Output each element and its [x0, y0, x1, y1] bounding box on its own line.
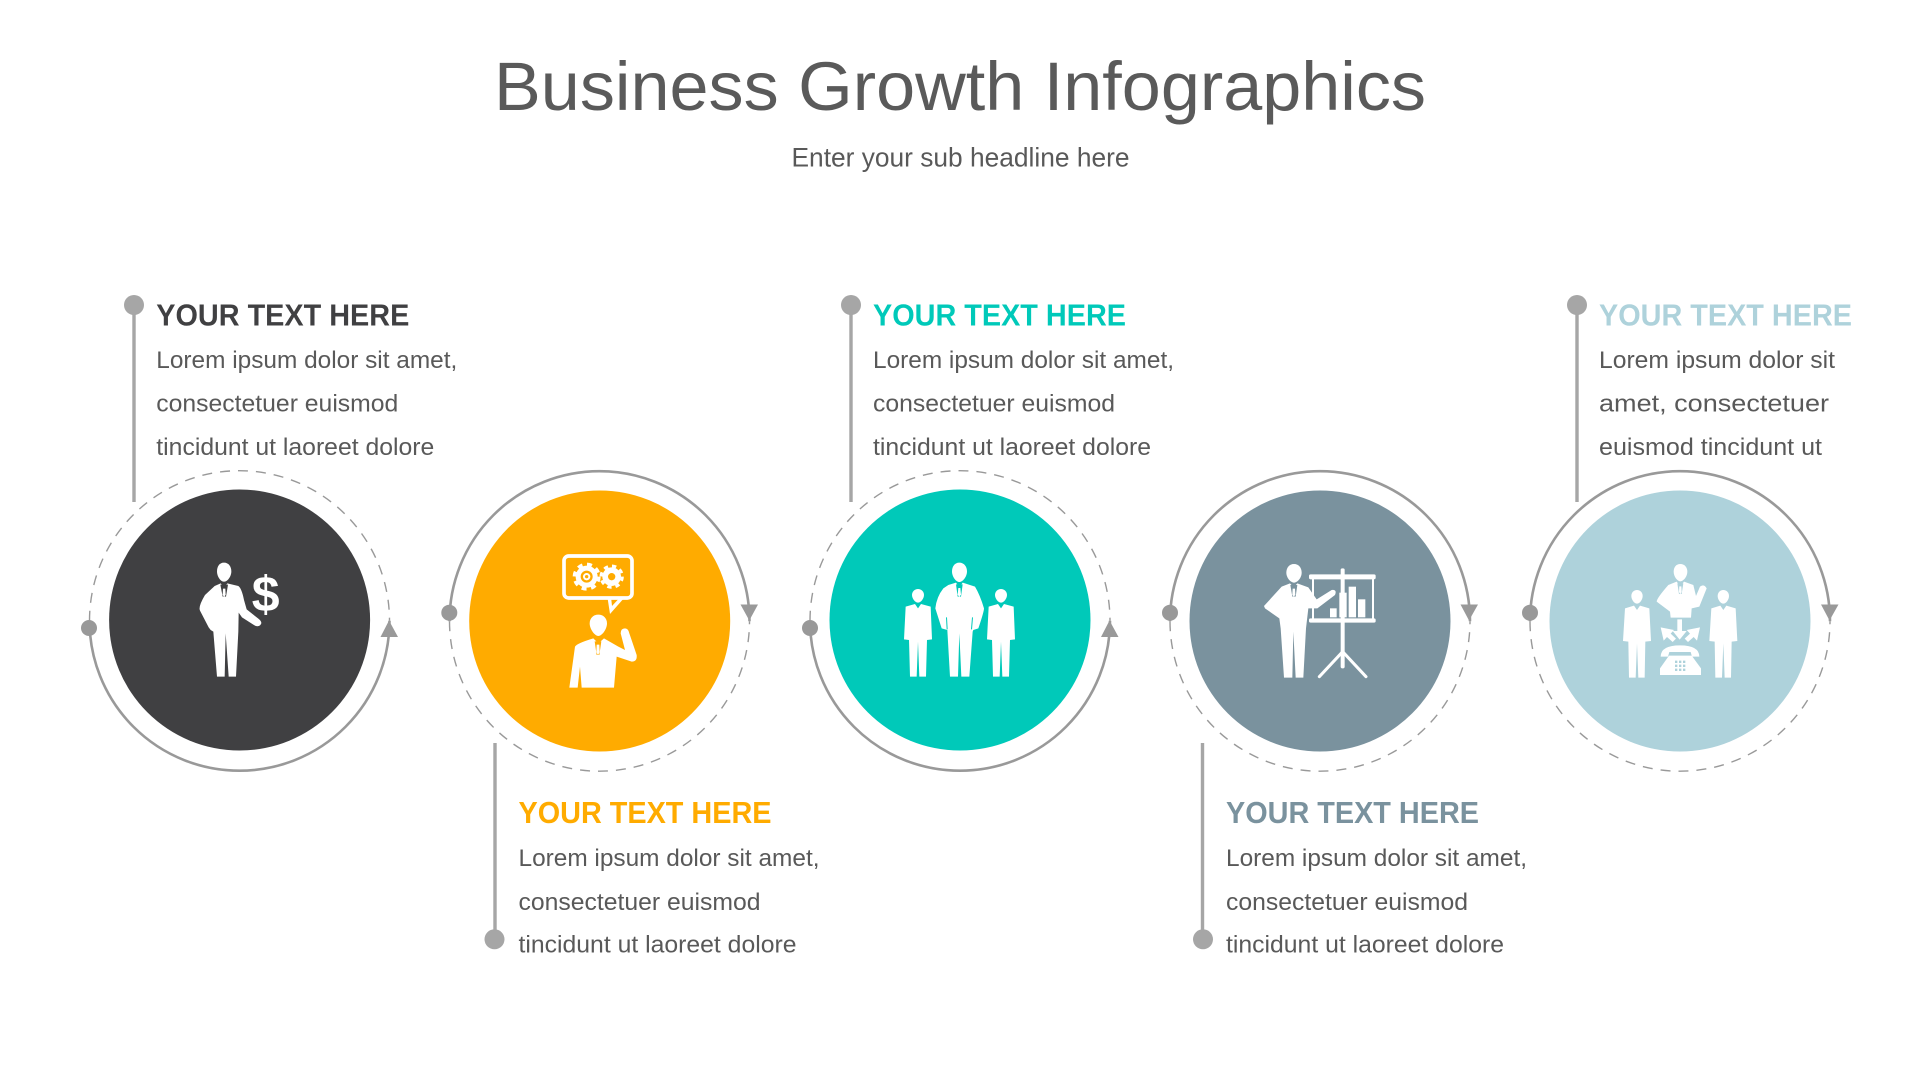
panel: step 3	[802, 295, 1174, 771]
body text 1: consectetuer euismod	[156, 390, 398, 418]
circle 3	[830, 490, 1090, 750]
body text 2: consectetuer euismod	[518, 889, 760, 916]
body text 3: tincidunt ut laoreet dolore	[873, 434, 1151, 461]
body text 1: Lorem ipsum dolor sit amet,	[156, 347, 457, 374]
heading 1: YOUR TEXT HERE	[156, 298, 409, 333]
circle 5	[1550, 490, 1810, 752]
body text 3	[873, 347, 1174, 461]
body text 5: euismod tincidunt ut	[1599, 434, 1822, 461]
connector line 4	[1193, 743, 1213, 949]
icon: businessman with dollar sign: $	[252, 566, 280, 622]
body text 3: Lorem ipsum dolor sit amet,	[873, 347, 1174, 374]
circle 1	[109, 490, 370, 750]
connector line 5	[1567, 295, 1587, 502]
ring 3 with arrow	[802, 471, 1118, 771]
panel: step 2	[441, 471, 820, 959]
body text 4: consectetuer euismod	[1226, 889, 1468, 916]
body text 5: Lorem ipsum dolor sit	[1599, 347, 1835, 374]
heading 2: YOUR TEXT HERE	[518, 795, 772, 830]
connector line 1	[124, 295, 144, 502]
ring 1 with arrow	[81, 471, 398, 771]
body text 2: Lorem ipsum dolor sit amet,	[518, 845, 820, 872]
icon: presenter with chart board	[1264, 564, 1376, 678]
body text 5	[1599, 347, 1835, 461]
ring 4 with arrow	[1162, 471, 1478, 771]
heading 4: YOUR TEXT HERE	[1226, 795, 1479, 830]
body text 1	[156, 347, 457, 461]
body text 4: Lorem ipsum dolor sit amet,	[1226, 845, 1527, 872]
title: Business Growth Infographics	[494, 48, 1426, 125]
body text 2	[518, 845, 820, 959]
body text 4	[1226, 845, 1527, 959]
circle 2	[469, 490, 730, 752]
connector line 3	[841, 295, 861, 502]
icon: businessman with dollar sign	[200, 563, 280, 677]
icon: three businessmen	[904, 563, 1015, 677]
icon: team around telephone	[1623, 564, 1737, 678]
body text 5: amet, consectetuer	[1599, 390, 1829, 418]
body text 2: tincidunt ut laoreet dolore	[518, 932, 796, 959]
connector line 2	[484, 743, 504, 949]
circle 4	[1190, 490, 1450, 752]
panel: step 4	[1162, 471, 1527, 959]
body text 1: tincidunt ut laoreet dolore	[156, 434, 434, 461]
icon: person with gears speech bubble	[564, 556, 637, 688]
panel: step 5	[1522, 295, 1852, 771]
panel: step 1	[81, 295, 457, 771]
body text 4: tincidunt ut laoreet dolore	[1226, 932, 1504, 959]
ring 2 with arrow	[441, 471, 758, 771]
subtitle: Enter your sub headline here	[792, 142, 1130, 172]
ring 5 with arrow	[1522, 471, 1838, 771]
heading 3: YOUR TEXT HERE	[873, 298, 1126, 333]
body text 3: consectetuer euismod	[873, 390, 1115, 418]
heading 5: YOUR TEXT HERE	[1599, 298, 1852, 333]
